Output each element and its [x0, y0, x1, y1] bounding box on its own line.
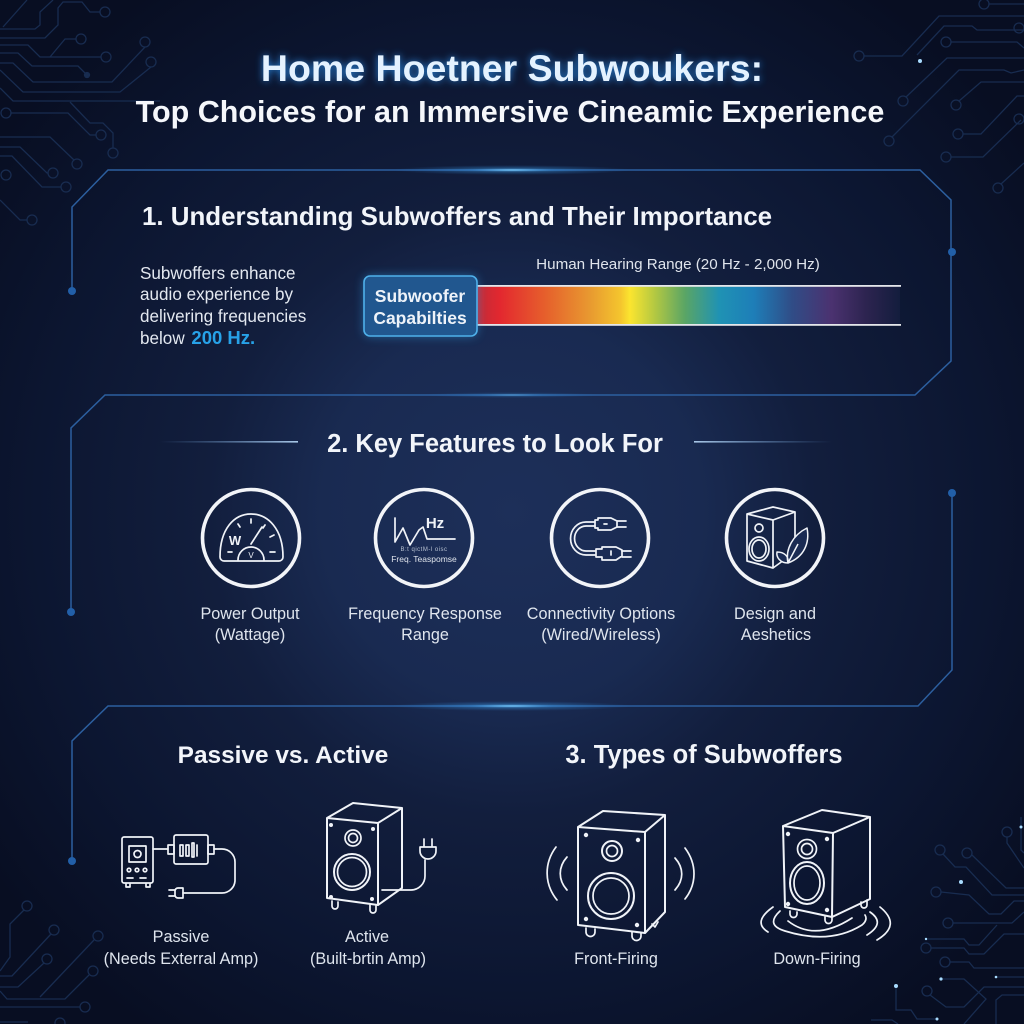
frame nodes [67, 248, 956, 865]
label: frequency response [348, 605, 502, 644]
heading passive vs active: Passive vs. Active [178, 742, 388, 769]
intro text [140, 264, 306, 348]
label: frequency response: Range [401, 626, 449, 644]
intro text: Subwoffers enhance [140, 264, 296, 283]
title: Home Hoetner Subwoukers: [261, 47, 763, 89]
heading 2: 2. Key Features to Look For [327, 430, 663, 458]
icon: power gauge: V [248, 551, 254, 560]
heading rule right [694, 441, 832, 443]
panel: types of subwoofers [104, 741, 890, 968]
label: active: (Built-brtin Amp) [310, 950, 426, 968]
label: design: Design and [734, 605, 816, 623]
title: Home Hoetner Subwoukers: [261, 47, 763, 89]
label: connectivity: (Wired/Wireless) [541, 626, 661, 644]
label: power output: Power Output [201, 605, 300, 623]
label: active: Active [345, 928, 389, 946]
icon: frequency response: B:t qictM-l oisc [400, 547, 448, 553]
label: passive [104, 928, 258, 968]
label: passive: Passive [153, 928, 209, 946]
icon: design speaker and leaf [726, 490, 824, 586]
subwoofer capabilities box: Capabilties [373, 308, 467, 328]
icon: front-firing speaker [547, 811, 694, 940]
label: passive: (Needs Exterral Amp) [104, 950, 258, 968]
icon: passive with external amp [122, 835, 235, 898]
icon: connectivity [552, 490, 648, 586]
sparkles [894, 59, 1022, 1020]
hearing range label: Human Hearing Range (20 Hz - 2,000 Hz) [536, 256, 820, 273]
intro text: delivering frequencies [140, 307, 306, 326]
label: design: Aeshetics [741, 626, 811, 644]
intro text: audio experience by [140, 285, 293, 304]
label: connectivity: Connectivity Options [527, 605, 675, 623]
panel: key features [160, 430, 832, 644]
label: active [310, 928, 426, 968]
title: Top Choices for an Immersive Cineamic Experience [136, 95, 884, 129]
icon: frequency response: Hz [426, 515, 444, 532]
label: design [734, 605, 816, 644]
frame glow highlights [392, 165, 632, 711]
heading 3: 3. Types of Subwoffers [565, 741, 843, 769]
label: connectivity [527, 605, 675, 644]
intro text: below 200 Hz. [140, 327, 255, 348]
panel: understanding subwoofers [140, 203, 901, 348]
label: frequency response: Frequency Response [348, 605, 502, 623]
title [136, 47, 884, 129]
label: power output [201, 605, 300, 644]
icon: active speaker [327, 803, 436, 913]
icon: power gauge: W [229, 533, 242, 548]
icon: down-firing speaker [761, 810, 890, 940]
icon: frequency response: Freq. Teaspomse [391, 554, 457, 564]
subwoofer capabilities box: Subwoofer [375, 286, 465, 306]
label: down-firing: Down-Firing [773, 950, 861, 968]
label: power output: (Wattage) [215, 626, 285, 644]
frequency spectrum bar [466, 285, 901, 326]
heading rule left [160, 441, 298, 443]
circuit pattern: bottom left [0, 901, 103, 1024]
heading 1: 1. Understanding Subwoffers and Their Importance [142, 203, 772, 231]
icon: frequency response [376, 490, 472, 586]
panel frame lines [71, 170, 952, 858]
circuit pattern: top left [0, 0, 160, 225]
circuit pattern: top right [854, 0, 1024, 193]
label: front-firing: Front-Firing [574, 950, 658, 968]
icon: power gauge [202, 490, 300, 586]
circuit pattern: bottom right [871, 817, 1024, 1024]
subwoofer capabilities box [364, 276, 477, 336]
